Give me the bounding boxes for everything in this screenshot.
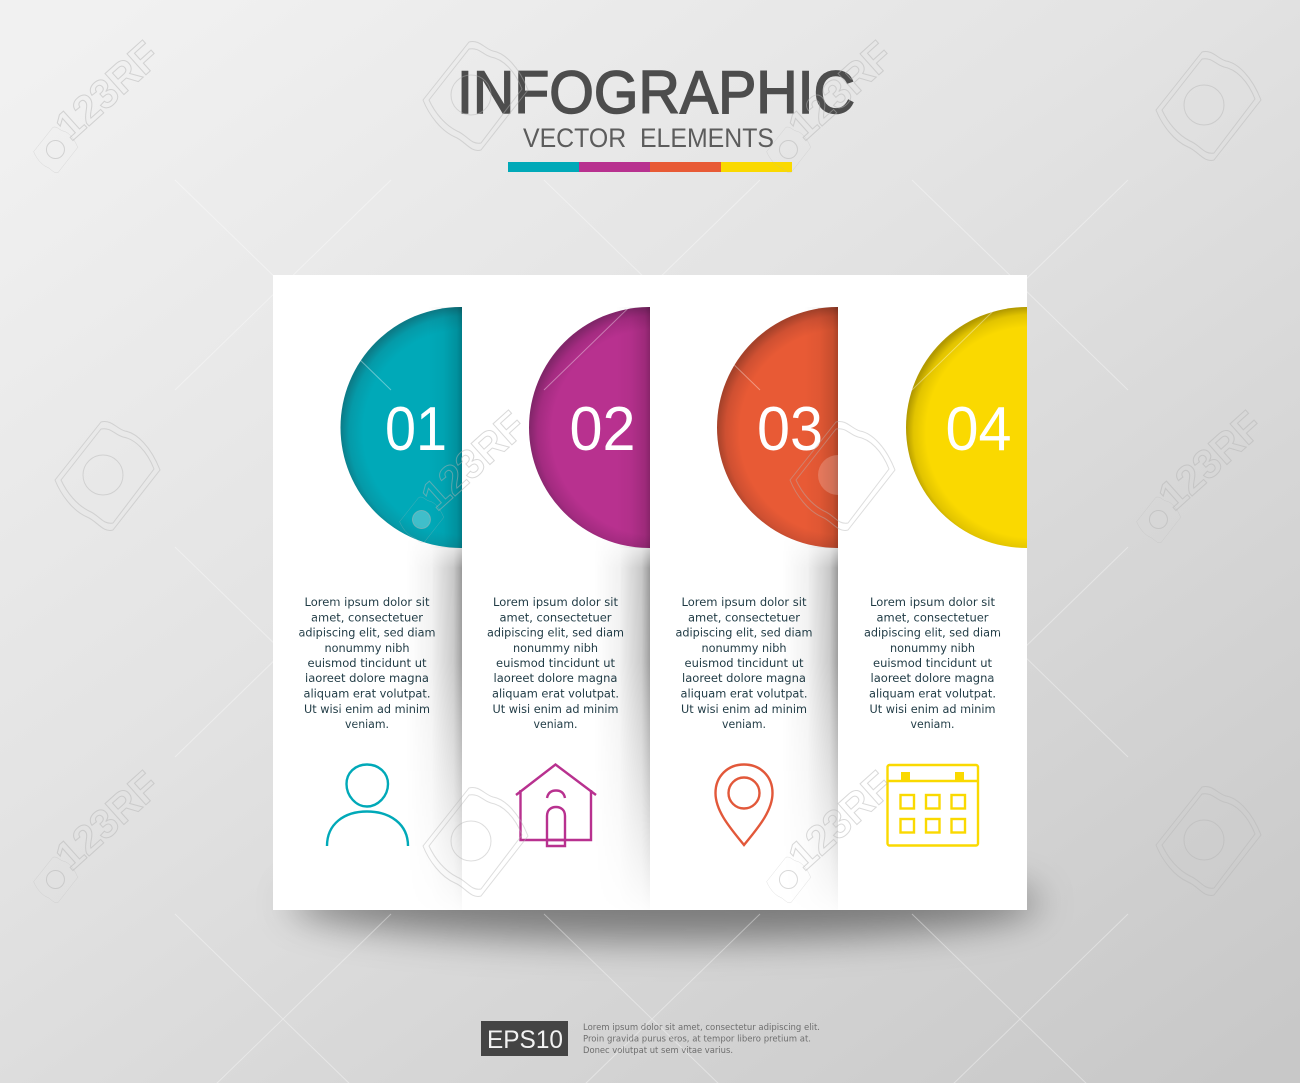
footer note: Proin gravida purus eros, at tempor libero pretium at. (583, 1034, 811, 1044)
text block 01: euismod tincidunt ut (308, 656, 427, 670)
text block 02: aliquam erat volutpat. (492, 686, 619, 700)
panel: step 02 (462, 275, 770, 910)
text block 01: nonummy nibh (324, 641, 410, 655)
number 04: 04 (946, 395, 1012, 464)
number 03: 03 (757, 395, 823, 464)
text block 02: Lorem ipsum dolor sit (493, 595, 618, 609)
text block 04: euismod tincidunt ut (873, 656, 992, 670)
watermark: 123RF logos: 123RF (46, 762, 169, 879)
text block 02: Ut wisi enim ad minim (492, 702, 618, 716)
circle: 01 (340, 307, 462, 548)
watermark: 123RF logos: 123RF (1149, 402, 1272, 519)
shadow: column 2 fold (610, 546, 650, 896)
text block 03: veniam. (722, 717, 766, 731)
text block 04: laoreet dolore magna (870, 671, 994, 685)
text block 04: nonummy nibh (890, 641, 975, 655)
text block 04: Lorem ipsum dolor sit (870, 595, 995, 609)
text block 03: euismod tincidunt ut (684, 656, 804, 670)
number 02: 02 (570, 395, 636, 464)
text block 04: aliquam erat volutpat. (869, 686, 996, 700)
text block 03: Lorem ipsum dolor sit (682, 595, 807, 609)
watermark: 123RF logos: 123RF (779, 32, 902, 149)
text block 01: Ut wisi enim ad minim (304, 702, 430, 716)
watermark: 123RF logos: 123RF (412, 402, 535, 519)
text block 03: laoreet dolore magna (682, 671, 806, 685)
panel drop shadow (290, 865, 1040, 941)
EPS10 badge: EPS10 (487, 1026, 563, 1054)
icon: person (327, 764, 408, 846)
number 01: 01 (385, 395, 447, 464)
text block 01: laoreet dolore magna (305, 671, 429, 685)
footer note: Donec volutpat ut sem vitae varius. (583, 1046, 733, 1056)
text block 04: veniam. (910, 717, 954, 731)
icon: house (516, 764, 596, 846)
text block 03: adipiscing elit, sed diam (676, 626, 812, 640)
text block 01: amet, consectetuer (311, 610, 423, 624)
text block 02: euismod tincidunt ut (496, 656, 615, 670)
text block 01: Lorem ipsum dolor sit (304, 595, 430, 609)
circle: 03 (717, 307, 838, 548)
text block 03: aliquam erat volutpat. (680, 686, 808, 700)
watermark: 123RF logos: 123RF (779, 762, 902, 879)
text block 01 (298, 595, 436, 731)
text block 02 (487, 595, 624, 731)
watermark lines (175, 180, 1128, 1083)
panel: step 03 (650, 275, 958, 910)
colour bar (508, 162, 792, 172)
text block 04: amet, consectetuer (876, 610, 989, 624)
text block 03 (676, 595, 812, 731)
watermark: 123RF logos: 123RF (46, 32, 169, 149)
icon: map pin (716, 764, 772, 845)
footer note: Lorem ipsum dolor sit amet, consectetur adipiscing elit. (583, 1023, 820, 1033)
text block 04: Ut wisi enim ad minim (870, 702, 996, 716)
shadow: column 3 fold (798, 546, 838, 896)
footer note (583, 1023, 820, 1056)
text block 02: laoreet dolore magna (494, 671, 618, 685)
panel: step 04 (838, 275, 1027, 910)
circle: 02 (529, 307, 650, 548)
text block 02: veniam. (534, 717, 578, 731)
panel: step 01 (273, 275, 582, 910)
title: INFOGRAPHIC (457, 59, 855, 126)
text block 03: nonummy nibh (702, 641, 786, 655)
text block 04: adipiscing elit, sed diam (864, 626, 1001, 640)
watermark: egg outlines (55, 41, 1261, 896)
circle: 04 (906, 307, 1027, 548)
text block 01: adipiscing elit, sed diam (298, 626, 436, 640)
icon: calendar (888, 765, 978, 846)
text block 02: amet, consectetuer (500, 610, 612, 624)
shadow: column 1 fold (422, 546, 462, 896)
subtitle: VECTOR ELEMENTS (523, 123, 774, 153)
text block 01: veniam. (345, 717, 389, 731)
text block 01: aliquam erat volutpat. (304, 686, 430, 700)
text block 04 (864, 595, 1001, 731)
text block 02: nonummy nibh (513, 641, 598, 655)
text block 02: adipiscing elit, sed diam (487, 626, 624, 640)
text block 03: Ut wisi enim ad minim (681, 702, 807, 716)
text block 03: amet, consectetuer (688, 610, 800, 624)
